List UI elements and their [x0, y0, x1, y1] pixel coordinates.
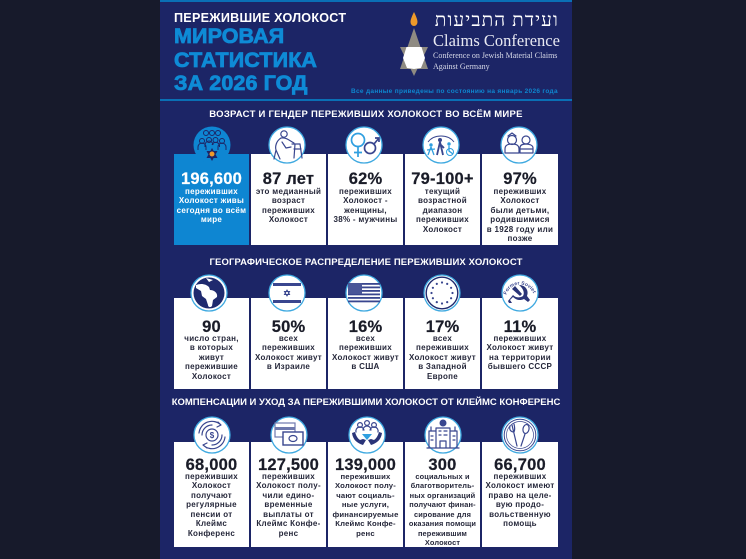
card: 196,600: сегодня во всём [177, 206, 246, 215]
card: 127,500: Клеймс Конфе- [256, 519, 321, 528]
icon: globe [190, 274, 228, 312]
card: 17% Western Europe [405, 298, 480, 389]
card: 90 countries: число стран, [184, 334, 239, 343]
card: 127,500: временные [264, 500, 313, 509]
card: 139,000: чают социаль- [336, 491, 395, 500]
card: 139,000: переживших [340, 472, 391, 481]
icon: flag of Israel [268, 274, 306, 312]
card: 300 organizations: получают финан- [409, 500, 476, 509]
card: 90 countries [174, 298, 249, 389]
card: 300 organizations: ных организаций [410, 491, 475, 500]
card: 50% Israel: Холокост живут [255, 353, 322, 362]
card: 196,600: 196,600 [181, 170, 242, 188]
card: 300 organizations [405, 442, 480, 547]
card: 139,000 [328, 442, 403, 547]
card: 66,700: Холокост имеют [485, 481, 555, 490]
card: 16% USA: в США [351, 362, 380, 371]
dark background panel [160, 0, 572, 559]
title: overline: ПЕРЕЖИВШИЕ ХОЛОКОСТ [174, 11, 346, 25]
card: 17% Western Europe: Холокост живут [409, 353, 476, 362]
logo: Claims Conference wordmark [433, 10, 560, 71]
card: 62%: Холокост - [343, 196, 388, 205]
icon: elderly person with walker [268, 126, 306, 164]
card: 196,600: мире [201, 215, 222, 224]
card: 300 organizations: сирование для [414, 510, 471, 519]
card: 97%: 97% [503, 170, 537, 188]
title: main heading: ЗА 2026 ГОД [174, 71, 308, 95]
icon: hammer and sickle, Former Soviet Union [501, 274, 539, 312]
card: 90 countries: пережившие [185, 362, 238, 371]
card: 11% former USSR: 11% [504, 318, 536, 336]
card: 127,500: ренс [279, 529, 298, 538]
card: 17% Western Europe: переживших [416, 343, 469, 352]
card: 11% former USSR: Холокост живут [486, 343, 554, 352]
card: 87 лет [251, 154, 326, 245]
card: 50% Israel [251, 298, 326, 389]
card: 11% former USSR: бывшего СССР [488, 362, 552, 371]
card: 62%: 62% [349, 170, 382, 188]
card: 79-100+: переживших [416, 215, 469, 224]
icon: cards and banknote [270, 416, 308, 454]
card: 196,600: Холокост живы [179, 196, 244, 205]
card: 16% USA: всех [356, 334, 375, 343]
card: 97%: позже [508, 234, 532, 243]
card: 50% Israel: переживших [262, 343, 315, 352]
heading: geography: ГЕОГРАФИЧЕСКОЕ РАСПРЕДЕЛЕНИЕ ПЕРЕЖИВШИХ ХОЛОКОСТ [210, 256, 522, 268]
card: 17% Western Europe: 17% [426, 318, 459, 336]
card: 79-100+: текущий [425, 187, 460, 196]
card: 50% Israel: 50% [272, 318, 305, 336]
card: 90 countries: живут [199, 353, 224, 362]
card: 11% former USSR: переживших [493, 334, 547, 343]
card: 139,000: ренс [356, 529, 375, 538]
card: 300 organizations: оказания помощи [409, 519, 476, 528]
card: 127,500 [251, 442, 326, 547]
card: 139,000: 139,000 [335, 456, 396, 474]
card: 50% Israel: в Израиле [267, 362, 310, 371]
icon: EU stars [423, 274, 461, 312]
card: 87 лет: возраст [272, 196, 305, 205]
card: 87 лет: Холокост [269, 215, 308, 224]
card: 16% USA: Холокост живут [332, 353, 399, 362]
card: 68,000: пенсии от [191, 510, 232, 519]
icon: hands holding people [348, 416, 386, 454]
card: 68,000: получают [191, 491, 232, 500]
card: 17% Western Europe: в Западной [418, 362, 467, 371]
card: 11% former USSR: на территории [489, 353, 551, 362]
card: 139,000: Холокост полу- [335, 481, 396, 490]
card: 139,000: ные услуги, [342, 500, 389, 509]
icon: child survivors [500, 126, 538, 164]
icon: people of different ages [422, 126, 460, 164]
icon: plate with cutlery [501, 416, 539, 454]
icon: group of survivors [194, 126, 230, 161]
card: 68,000: регулярные [186, 500, 237, 509]
card: 50% Israel: всех [279, 334, 298, 343]
card: 300 organizations: социальных и [415, 472, 470, 481]
icon: pension cycle: $ [210, 431, 215, 440]
card: 300 organizations: 300 [428, 456, 457, 474]
logo icon: candle and star [400, 12, 428, 76]
card: 66,700: вольственную [489, 510, 551, 519]
card: 62%: 38% - мужчины [333, 215, 398, 224]
card: 16% USA [328, 298, 403, 389]
card: 66,700 [482, 442, 558, 547]
card: 62% [328, 154, 403, 245]
icon: pension cycle [193, 416, 231, 454]
title: main heading: МИРОВАЯ [174, 24, 284, 48]
card: 79-100+: диапазон [423, 206, 462, 215]
card: 16% USA: 16% [349, 318, 382, 336]
icon: hammer and sickle, Former Soviet Union: Former Soviet Union [503, 281, 536, 295]
title block [174, 11, 346, 95]
card: 139,000: финансируемые [332, 510, 399, 519]
card: 196,600 [174, 154, 249, 245]
card: 97% [482, 154, 558, 245]
card: 90 countries: 90 [202, 318, 221, 336]
logo: subtitle [433, 51, 558, 71]
card: 62%: переживших [339, 187, 392, 196]
card: 11% former USSR [482, 298, 558, 389]
card: 79-100+: Холокост [423, 225, 462, 234]
card: 127,500: выплаты от [263, 510, 314, 519]
card: 87 лет: 87 лет [263, 170, 314, 188]
card: 66,700: переживших [493, 472, 547, 481]
title: main heading: СТАТИСТИКА [174, 48, 317, 72]
icon: gender symbols [345, 126, 383, 164]
card: 68,000: Конференс [188, 529, 235, 538]
card: 127,500: 127,500 [258, 456, 319, 474]
card: 66,700: 66,700 [494, 456, 546, 474]
card: 90 countries: в которых [190, 343, 233, 352]
card: 97%: родившимися [490, 215, 550, 224]
logo: subtitle: Conference on Jewish Material Claims [433, 51, 557, 60]
card: 300 organizations: пережившим [418, 529, 467, 538]
logo: subtitle: Against Germany [433, 62, 490, 71]
card: 68,000: переживших [185, 472, 238, 481]
title: main heading [174, 24, 317, 95]
card: 97%: в 1928 году или [487, 225, 553, 234]
card: 127,500: чили едино- [263, 491, 314, 500]
card: 97%: Холокост [500, 196, 540, 205]
card: 62%: женщины, [344, 206, 387, 215]
card: 139,000: Клеймс Конфе- [335, 519, 396, 528]
icon: flag of USA [345, 274, 383, 312]
card: 87 лет: это медианный [256, 187, 321, 196]
card: 79-100+ [405, 154, 480, 245]
icon: organization building [424, 416, 462, 454]
card: 97%: переживших [493, 187, 547, 196]
card: 16% USA: переживших [339, 343, 392, 352]
card: 66,700: вую продо- [496, 500, 544, 509]
card: 87 лет: переживших [262, 206, 315, 215]
card: 17% Western Europe: Европе [427, 372, 458, 381]
card: 17% Western Europe: всех [433, 334, 452, 343]
card: 79-100+: возрастной [418, 196, 467, 205]
heading: compensation and care: КОМПЕНСАЦИИ И УХОД ЗА ПЕРЕЖИВШИМИ ХОЛОКОСТ ОТ КЛЕЙМС КОНФЕРЕНС [172, 397, 560, 408]
card: 97%: были детьми, [491, 206, 549, 215]
card: 300 organizations: Холокост [425, 538, 460, 547]
card: 68,000: Холокост [192, 481, 231, 490]
date note: Все данные приведены по состоянию на январь 2026 года [351, 88, 558, 95]
card: 66,700: помощь [503, 519, 537, 528]
heading: age and gender: ВОЗРАСТ И ГЕНДЕР ПЕРЕЖИВШИХ ХОЛОКОСТ ВО ВСЁМ МИРЕ [209, 109, 523, 120]
card: 79-100+: 79-100+ [411, 170, 474, 188]
card: 68,000: 68,000 [186, 456, 237, 474]
logo: English name: Claims Conference [433, 31, 560, 50]
card: 66,700: право на целе- [488, 491, 552, 500]
card: 196,600: переживших [185, 187, 238, 196]
card: 127,500: переживших [262, 472, 315, 481]
card: 300 organizations: благотворитель- [411, 481, 474, 490]
card: 127,500: Холокост полу- [256, 481, 321, 490]
card: 68,000: Клеймс [196, 519, 227, 528]
card: 68,000 [174, 442, 249, 547]
logo: Hebrew name: ועידת התביעות [435, 10, 559, 31]
card: 90 countries: Холокост [192, 372, 231, 381]
